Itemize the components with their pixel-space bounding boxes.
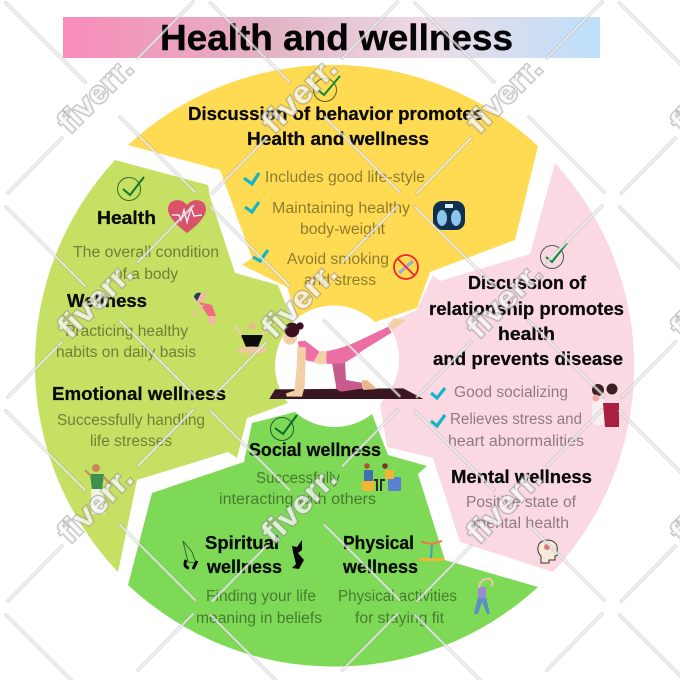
heading: relationship (429, 273, 624, 369)
title banner (63, 17, 600, 58)
icon: jumping silhouette (292, 540, 304, 569)
panel: social, spiritual, physical (green) (128, 412, 538, 667)
heading: behavior: Discussion of behavior promotes (188, 104, 483, 124)
text: mental description (466, 494, 577, 532)
icon: side stretch person (474, 579, 493, 614)
text: mental description: Positive state of (466, 494, 577, 511)
text: physical description: Physical activities (338, 588, 457, 605)
watermark text: fiverr. (254, 460, 344, 550)
list: behavior items: body-weight (300, 221, 386, 238)
icon: standing person (85, 464, 110, 514)
text: physical description: for staying fit (355, 610, 445, 627)
text: emotional description: life stresses (90, 433, 172, 450)
icon: heart (168, 200, 206, 233)
watermark text: fiverr. (254, 50, 344, 140)
icon: two people talking (362, 463, 401, 491)
heading: behavior (188, 104, 483, 149)
text: spiritual description (196, 588, 322, 627)
text: social description: interacting with others (219, 491, 376, 508)
heading: health: Health (97, 208, 156, 228)
text: emotional description: Successfully handling (57, 412, 205, 429)
list: relationship items: Good socializing (454, 384, 568, 401)
heading: physical wellness (342, 533, 418, 577)
text: health description (73, 244, 219, 283)
text: wellness description (56, 323, 196, 361)
icon: stretching person (193, 290, 216, 324)
text: physical description (338, 588, 457, 627)
text: emotional description (57, 412, 205, 450)
list: behavior items: Maintaining healthy (272, 200, 410, 217)
watermark text: fiverr. (254, 255, 344, 345)
heading: social wellness: Social wellness (249, 440, 381, 460)
icon: yoga pose (419, 541, 444, 561)
heading: behavior: Health and wellness (247, 129, 429, 149)
heading: spiritual wellness: wellness (206, 557, 282, 577)
icon: weighing scale (433, 201, 465, 230)
text: social description: Successfully (256, 470, 340, 487)
center circle (276, 307, 394, 425)
heading: relationship: and prevents disease (433, 349, 623, 369)
heading: emotional wellness: Emotional wellness (52, 384, 226, 404)
heading: spiritual wellness (205, 533, 282, 577)
icon: hugging people (592, 384, 619, 427)
text: spiritual description: meaning in beliefs (196, 610, 322, 627)
list: behavior items: and stress (304, 272, 376, 289)
panel: behavior (yellow) (128, 65, 538, 322)
heading: spiritual wellness: Spiritual (205, 533, 279, 553)
watermark text: fiverr. (50, 460, 140, 550)
watermark text: fiverr. (459, 460, 549, 550)
heading: wellness: Wellness (67, 291, 147, 311)
text: spiritual description: Finding your life (206, 588, 316, 605)
heading: relationship: Discussion of (468, 273, 587, 293)
panel: overall wellness (lime) (35, 160, 293, 572)
heading: physical wellness: wellness (342, 557, 418, 577)
list: relationship items (431, 384, 584, 450)
watermark text: fiverr. (50, 255, 140, 345)
list: relationship items: heart abnormalities (448, 433, 584, 450)
illustration: woman doing yoga on mat (269, 318, 423, 399)
icon: circled check (118, 177, 144, 200)
watermark text: fiverr. (459, 50, 549, 140)
icon: circled check (540, 243, 567, 268)
icon: circled check (270, 415, 297, 440)
text: health description: of a body (114, 266, 178, 283)
icon: circled check (314, 76, 340, 102)
text: wellness description: Practicing healthy (65, 323, 188, 340)
icon: praying hands (183, 541, 197, 569)
heading: relationship: relationship promotes (429, 299, 624, 319)
panel: relationship and mental wellness (pink) (380, 163, 634, 572)
watermark text (50, 50, 680, 550)
text: mental description: mental health (473, 515, 569, 532)
icon: head with brain (538, 540, 558, 563)
icon: meditating person (235, 322, 269, 354)
text: wellness description: habits on daily basis (56, 344, 196, 361)
title banner: Health and wellness (160, 17, 513, 58)
watermark text: fiverr. (459, 255, 549, 345)
watermark text: fiverr. (50, 50, 140, 140)
list: behavior items: Includes good life-style (265, 169, 425, 186)
heading: relationship: health (498, 324, 555, 344)
text: social description (219, 470, 376, 508)
heading: physical wellness: Physical (343, 533, 414, 553)
heading: mental wellness: Mental wellness (451, 467, 592, 487)
icon: no smoking (394, 255, 418, 279)
list: behavior items (244, 169, 425, 289)
list: relationship items: Relieves stress and (450, 411, 582, 428)
text: health description: The overall condition (73, 244, 219, 261)
list: behavior items: Avoid smoking (287, 251, 389, 268)
